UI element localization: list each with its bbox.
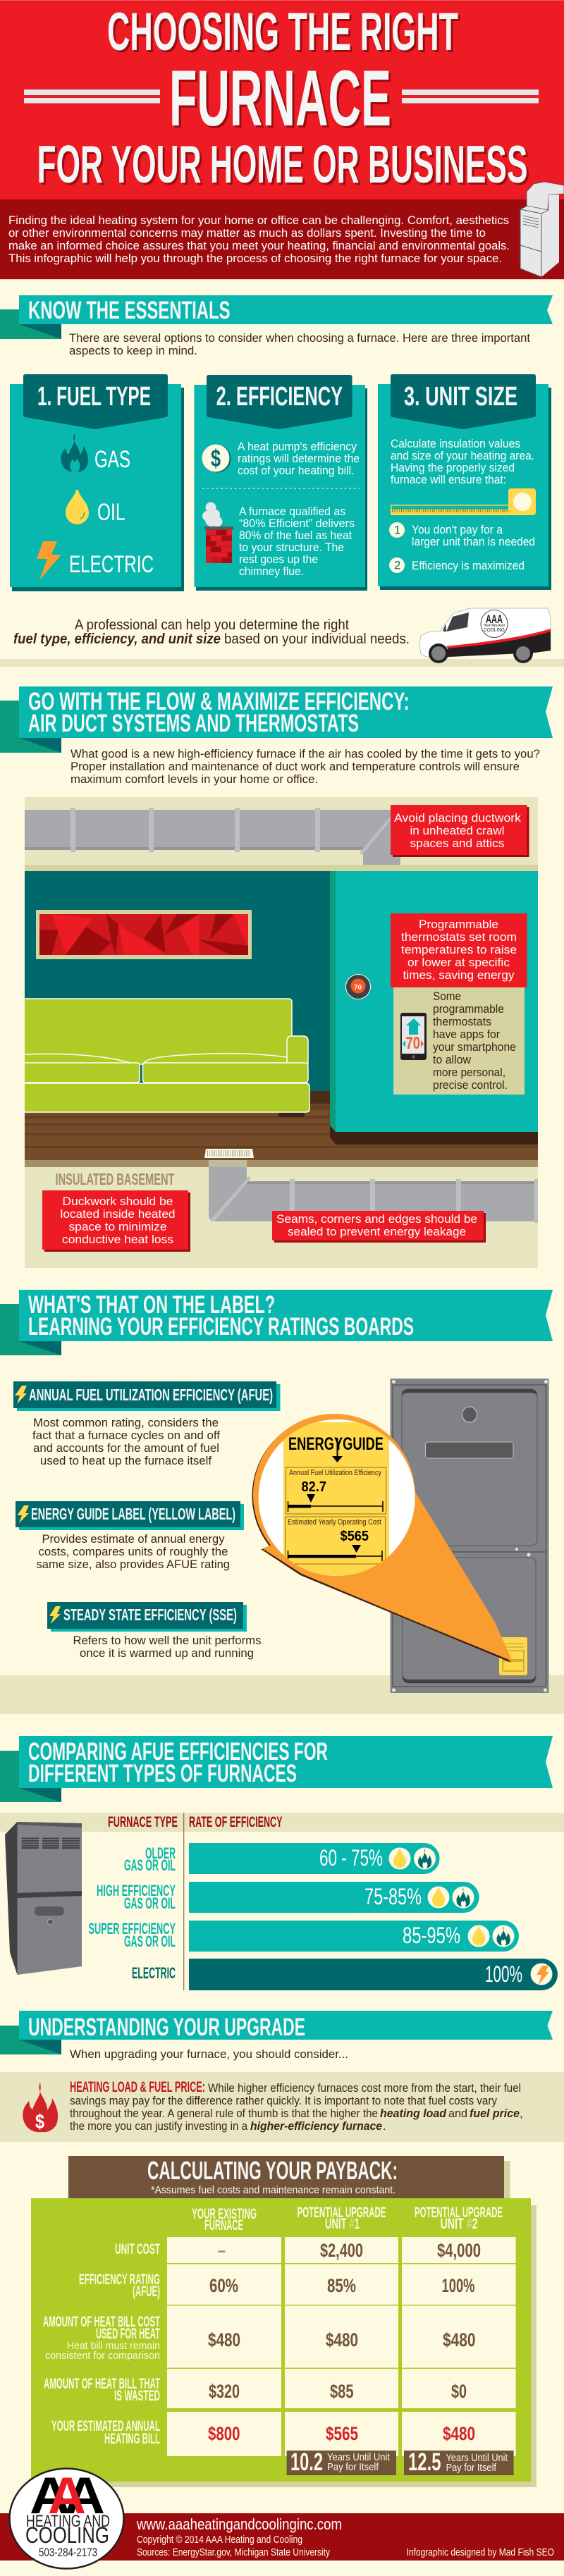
panel: smartphone apps: more personal,: [433, 1066, 505, 1079]
row: super efficiency gas or oil: 85-95%: [403, 1923, 460, 1948]
row: electric: [132, 1959, 558, 1990]
energy guide label: Annual Fuel Utilization Efficiency: [289, 1469, 381, 1477]
section heading: comparing AFUE: DIFFERENT TYPES OF FURNACES: [28, 1760, 297, 1787]
row: heat bill used: [43, 2314, 475, 2362]
panel: smartphone apps: to allow: [433, 1054, 471, 1066]
text: calculate insulation: Calculate insulation values: [391, 438, 520, 450]
text: heat pump: ratings will determine the: [238, 452, 360, 465]
text: essentials intro: [69, 332, 530, 357]
rating: AFUE: used to heat up the furnace itself: [40, 1455, 212, 1467]
callout: ductwork location: conductive heat loss: [62, 1233, 173, 1246]
chart header: [108, 1814, 282, 1830]
icon: dollar coin: $: [211, 445, 221, 472]
logo: AAA heating and cooling: [10, 2467, 124, 2568]
attic: [25, 797, 538, 871]
rating: steady state efficiency: STEADY STATE EFFICIENCY (SSE): [63, 1606, 237, 1624]
label: insulated basement: INSULATED BASEMENT: [55, 1170, 175, 1188]
logo: AAA heating and cooling: 503-284-2173: [39, 2546, 97, 2559]
panel: intro: make an informed choice assures that you meet your heating, financial and environmental goals.: [8, 240, 510, 252]
section heading: label ratings: [0, 1290, 553, 1355]
text: 80 percent efficient: chimney flue.: [239, 565, 304, 578]
attic duct: [25, 808, 400, 865]
text: calculate insulation: Having the properly sized: [391, 462, 515, 474]
panel: efficiency: 2. EFFICIENCY: [216, 382, 343, 412]
chart: AFUE efficiency comparison: [0, 1813, 564, 1990]
payback badge: 12.5 years: 12.5: [408, 2448, 441, 2476]
text: 80 percent efficient: A furnace qualified as: [239, 505, 345, 518]
row: electric: ELECTRIC: [132, 1964, 176, 1982]
icon: service van: [419, 608, 551, 663]
icon: thermostat: [345, 974, 371, 999]
callout: seams: Seams, corners and edges should be: [276, 1213, 477, 1226]
callout: programmable thermostats: times, saving energy: [403, 969, 515, 982]
column headers: POTENTIAL UPGRADE: [298, 2205, 386, 2221]
energy guide label: ENERGYGUIDE: [288, 1434, 384, 1454]
icon: floor vent: [204, 1149, 254, 1158]
callout: ductwork location: located inside heated: [61, 1208, 175, 1221]
callout: programmable thermostats: temperatures to raise: [401, 944, 517, 956]
van logo: AAA: [486, 612, 503, 626]
row: estimated annual bill: HEATING BILL: [104, 2431, 160, 2447]
list item 2: 2: [394, 560, 400, 572]
row: heat bill wasted: $0: [451, 2381, 467, 2402]
text: heat pump: [238, 440, 360, 477]
payback badge: 10.2 years: Pay for Itself: [327, 2461, 379, 2473]
callout: programmable thermostats: thermostats set room: [401, 931, 517, 944]
payback badge: 12.5 years: [404, 2448, 514, 2476]
panel: house cross-section: [25, 797, 538, 1268]
van logo: COOLING: [484, 628, 505, 633]
callout: seams: [272, 1211, 486, 1243]
row: high efficiency gas or oil: 75-85%: [364, 1884, 422, 1909]
label: gas: GAS: [94, 446, 130, 473]
footer: [0, 2513, 564, 2560]
row: high efficiency gas or oil: GAS OR OIL: [124, 1894, 176, 1912]
icon: dollar coin: [202, 444, 231, 472]
chart header: FURNACE TYPE: [108, 1814, 178, 1830]
panel: payback table: [31, 2156, 537, 2487]
row: heat bill wasted: IS WASTED: [114, 2388, 160, 2404]
text: duct intro: maximum comfort levels in your home or office.: [70, 773, 318, 786]
icon: header furnace: [520, 182, 564, 277]
label: electric: ELECTRIC: [69, 551, 154, 578]
table cells: [167, 2237, 516, 2456]
van logo: HEATING AND: [484, 624, 505, 628]
row: heat bill used: $480: [208, 2329, 240, 2350]
icon: chimney: [202, 502, 233, 563]
icon: tape measure: [391, 488, 536, 515]
text: heat pump: A heat pump's efficiency: [238, 440, 357, 453]
icon: furnace front panel: [391, 1379, 548, 1693]
panel: intro: or other environmental concerns may matter as much as dollars spent. Investing the time to: [8, 227, 486, 240]
text: heating load: [70, 2079, 523, 2133]
text: duct intro: [70, 748, 540, 786]
section heading: air duct systems: AIR DUCT SYSTEMS AND THERMOSTATS: [28, 710, 359, 737]
icon: smartphone: [400, 1013, 427, 1060]
column headers: FURNACE: [204, 2217, 243, 2233]
table title: CALCULATING YOUR PAYBACK:: [147, 2156, 398, 2185]
rating: energy guide label: ENERGY GUIDE LABEL (YELLOW LABEL): [31, 1505, 235, 1523]
panel: smartphone apps: thermostats: [433, 1016, 491, 1028]
row: efficiency rating: 100%: [441, 2275, 475, 2296]
panel: smartphone apps: [393, 987, 525, 1095]
text: heating load: throughout the year. A general rule of thumb is that the higher the: [70, 2107, 378, 2120]
row: heat bill used: Heat bill must remain: [67, 2340, 160, 2352]
basement: [25, 1149, 538, 1268]
payback badge: 10.2 years: 10.2: [290, 2448, 323, 2476]
icon: electric bolt: [37, 541, 61, 580]
panel: fuel type: [10, 374, 184, 591]
text: 80 percent efficient: 80% of the fuel as heat: [239, 529, 352, 542]
text: calculate insulation: and size of your heating area.: [391, 450, 534, 462]
row: unit cost: $4,000: [437, 2240, 481, 2261]
text: 80 percent efficient: to your structure. The: [239, 541, 344, 554]
payback badge: 10.2 years: Years Until Unit: [327, 2451, 391, 2463]
row: older gas or oil: OLDER: [145, 1844, 176, 1862]
text: heating load: ,: [520, 2107, 523, 2120]
footer: Copyright © 2014 AAA Heating and Cooling: [137, 2534, 302, 2546]
icon: thermostat: 70: [354, 984, 362, 992]
row: heat bill wasted: $320: [209, 2381, 240, 2402]
text: heating load: heating load: [380, 2107, 447, 2120]
row: older gas or oil: 60 - 75%: [319, 1845, 383, 1871]
rating: energy guide label: costs, compares units of roughly the: [38, 1546, 228, 1558]
payback badge: 12.5 years: Pay for Itself: [446, 2462, 497, 2474]
list item 1: larger unit than is needed: [412, 536, 535, 548]
text: heat pump: cost of your heating bill.: [238, 464, 354, 477]
row: efficiency rating: EFFICIENCY RATING: [79, 2272, 160, 2288]
row: unit cost: UNIT COST: [115, 2241, 160, 2257]
row: unit cost: $2,400: [320, 2240, 363, 2261]
text: heating load: fuel price: [470, 2107, 520, 2120]
text: upgrade intro: When upgrading your furnace, you should consider...: [70, 2048, 348, 2061]
row: estimated annual bill: $480: [443, 2423, 475, 2444]
panel: intro: Finding the ideal heating system for your home or office can be challenging. Comfort, aesthetics: [8, 214, 509, 227]
icon: flame with dollar: [23, 2083, 58, 2133]
panel: intro: [0, 199, 564, 280]
column headers: UNIT #2: [440, 2216, 478, 2232]
row: estimated annual bill: $800: [208, 2423, 240, 2444]
callout: ductwork location: space to minimize: [69, 1221, 166, 1233]
row: heat bill wasted: $85: [330, 2381, 354, 2402]
row: super efficiency gas or oil: GAS OR OIL: [124, 1933, 176, 1950]
row: unit cost: [115, 2240, 481, 2261]
text: 80 percent efficient: rest goes up the: [239, 553, 318, 566]
column headers: UNIT #1: [325, 2216, 360, 2232]
callout: avoid ductwork: in unheated crawl: [410, 825, 505, 837]
text: heating load: HEATING LOAD & FUEL PRICE:: [70, 2079, 205, 2095]
row: older gas or oil: [124, 1843, 440, 1874]
text: heating load: While higher efficiency furnaces cost more from the start, their fuel: [208, 2082, 521, 2095]
energy guide label: 82.7: [302, 1479, 326, 1495]
text: professional help: fuel type, efficiency, and unit size: [13, 631, 221, 647]
list item 1: [389, 522, 535, 548]
row: efficiency rating: 60%: [209, 2275, 238, 2296]
icon: furnace side view: [5, 1822, 82, 1975]
text: 80 percent efficient: “80% Efficient” delivers: [239, 517, 355, 530]
callout: programmable thermostats: Programmable: [419, 918, 498, 931]
payback badge: 10.2 years: [287, 2448, 396, 2476]
rating: steady state efficiency: [47, 1602, 261, 1660]
callout: ductwork location: [42, 1190, 190, 1252]
callout: avoid ductwork: Avoid placing ductwork: [394, 812, 522, 825]
section heading: comparing AFUE: [0, 1736, 553, 1802]
text: essentials intro: aspects to keep in mind.: [69, 345, 197, 357]
panel: unit size: 3. UNIT SIZE: [404, 382, 517, 412]
row: estimated annual bill: [51, 2418, 475, 2447]
row: heat bill wasted: AMOUNT OF HEAT BILL THAT: [44, 2376, 160, 2392]
painting: [36, 910, 252, 959]
panel: unit size: [378, 374, 551, 590]
footer: www.aaaheatingandcoolinginc.com: [136, 2515, 342, 2533]
row: heat bill used: consistent for comparison: [45, 2350, 160, 2362]
callout: seams: sealed to prevent energy leakage: [288, 1226, 466, 1238]
icon: gas flame: [61, 434, 88, 472]
panel: smartphone apps: precise control.: [433, 1079, 508, 1092]
row: estimated annual bill: $565: [326, 2423, 358, 2444]
text: professional help: based on your individual needs.: [224, 631, 410, 647]
rating: AFUE: fact that a furnace cycles on and off: [32, 1429, 220, 1442]
callout: ductwork location: Duckwork should be: [62, 1195, 173, 1208]
icon: smartphone: 70: [406, 1034, 420, 1053]
callout: programmable thermostats: [391, 913, 527, 987]
callout: avoid ductwork: [391, 805, 529, 857]
text: calculate insulation: [391, 438, 534, 486]
panel: fuel type: 1. FUEL TYPE: [37, 382, 151, 412]
list item 2: [389, 557, 525, 573]
row: efficiency rating: [79, 2272, 475, 2300]
column headers: YOUR EXISTING: [192, 2206, 257, 2222]
text: professional help: [13, 617, 410, 647]
text: heating load: savings may pay for the difference rather quickly. It is important to note that fuel costs vary: [70, 2095, 498, 2107]
section heading: know the essentials: KNOW THE ESSENTIALS: [28, 297, 230, 324]
text: heating load: .: [383, 2120, 386, 2133]
table title: [68, 2156, 504, 2198]
row: efficiency rating: 85%: [327, 2275, 356, 2296]
icon: flame with dollar: $: [35, 2111, 44, 2133]
logo: AAA heating and cooling: COOLING: [25, 2522, 109, 2548]
section heading: comparing AFUE: COMPARING AFUE EFFICIENCIES FOR: [28, 1738, 328, 1765]
section heading: air duct systems: [0, 686, 553, 753]
row: unit cost: –: [218, 2240, 226, 2261]
text: duct intro: What good is a new high-efficiency furnace if the air has cooled by the time it gets to you?: [70, 748, 540, 760]
row: heat bill used: $480: [443, 2329, 475, 2350]
rating: steady state efficiency: Refers to how well the unit performs: [73, 1634, 261, 1647]
row: high efficiency gas or oil: [97, 1882, 479, 1913]
basement duct: [209, 1160, 538, 1223]
section heading: know the essentials: [0, 295, 553, 339]
van logo: [481, 610, 508, 637]
list item 1: You don't pay for a: [412, 524, 503, 536]
section heading: understanding your upgrade: UNDERSTANDING YOUR UPGRADE: [28, 2014, 305, 2041]
rating: energy guide label: same size, also provides AFUE rating: [37, 1558, 230, 1571]
energy guide label: $565: [341, 1529, 369, 1544]
row: heat bill used: USED FOR HEAT: [96, 2326, 160, 2342]
rating: AFUE: [13, 1381, 281, 1467]
row: heat bill used: $480: [326, 2329, 358, 2350]
panel: intro: This infographic will help you through the process of choosing the right furnace for your space.: [8, 252, 502, 265]
text: calculate insulation: furnace will ensure that:: [391, 474, 506, 486]
rating: AFUE: and accounts for the amount of fuel: [33, 1442, 219, 1455]
icon: small yellow label: [499, 1637, 527, 1675]
footer: Sources: EnergyStar.gov, Michigan State University: [137, 2547, 331, 2558]
text: 80 percent efficient: [239, 505, 355, 578]
section heading: label ratings: WHAT'S THAT ON THE LABEL?: [28, 1291, 275, 1319]
section heading: understanding your upgrade: [0, 2011, 553, 2054]
text: professional help: A professional can help you determine the right: [75, 617, 349, 633]
logo: AAA heating and cooling: A: [64, 2467, 105, 2525]
title: FURNACE: [169, 54, 391, 142]
sofa: [25, 999, 309, 1117]
list item 2: Efficiency is maximized: [412, 560, 525, 572]
column headers: [192, 2205, 503, 2233]
row: heat bill used: AMOUNT OF HEAT BILL COST: [43, 2314, 160, 2330]
header banner: [0, 0, 564, 199]
list item 1: 1: [394, 524, 400, 537]
panel: smartphone apps: your smartphone: [433, 1041, 516, 1054]
row: efficiency rating: (AFUE): [133, 2284, 160, 2300]
text: heating load: the more you can justify investing in a: [70, 2120, 248, 2133]
row: super efficiency gas or oil: [89, 1920, 519, 1952]
room walls and floor: [25, 871, 538, 1167]
row: estimated annual bill: YOUR ESTIMATED ANNUAL: [51, 2418, 160, 2434]
panel: smartphone apps: have apps for: [433, 1028, 500, 1041]
text: essentials intro: There are several options to consider when choosing a furnace. Here are three important: [69, 332, 530, 345]
panel: smartphone apps: programmable: [433, 1003, 504, 1016]
row: super efficiency gas or oil: SUPER EFFICIENCY: [89, 1920, 176, 1937]
table title: *Assumes fuel costs and maintenance remain constant.: [151, 2184, 396, 2196]
text: heating load: higher-efficiency furnace: [250, 2120, 382, 2133]
row: heat bill wasted: [44, 2376, 467, 2404]
magnifier callout: energy guide: [252, 1414, 513, 1663]
icon: oil drop: [66, 490, 89, 524]
callout: programmable thermostats: or lower at specific: [407, 956, 510, 969]
logo: AAA heating and cooling: A: [48, 2467, 86, 2525]
rating: energy guide label: [16, 1501, 244, 1571]
chart header: RATE OF EFFICIENCY: [189, 1814, 282, 1830]
rating: energy guide label: Provides estimate of annual energy: [42, 1533, 225, 1546]
row: high efficiency gas or oil: HIGH EFFICIENCY: [97, 1882, 176, 1899]
callout: avoid ductwork: spaces and attics: [410, 837, 505, 850]
payback badge: 12.5 years: Years Until Unit: [446, 2452, 508, 2464]
panel: smartphone apps: Some: [433, 990, 461, 1003]
text: heating load: and: [448, 2107, 467, 2120]
panel: heating load and fuel price: [0, 2072, 564, 2142]
label: oil: OIL: [97, 499, 125, 526]
panel: efficiency: [195, 375, 367, 591]
logo: AAA heating and cooling: A: [30, 2467, 70, 2525]
rating: AFUE: Most common rating, considers the: [33, 1417, 219, 1429]
rating: AFUE: ANNUAL FUEL UTILIZATION EFFICIENCY (AFUE): [29, 1386, 273, 1404]
energy guide label: [283, 1422, 389, 1579]
row: electric: 100%: [485, 1961, 522, 1987]
text: duct intro: Proper installation and maintenance of duct work and temperature controls will ensure: [70, 760, 520, 773]
energy guide label: Estimated Yearly Operating Cost: [288, 1518, 381, 1527]
rating: steady state efficiency: once it is warmed up and running: [80, 1647, 254, 1660]
title: [37, 2, 527, 194]
row: older gas or oil: GAS OR OIL: [124, 1856, 176, 1874]
logo: AAA heating and cooling: HEATING AND: [26, 2512, 110, 2531]
